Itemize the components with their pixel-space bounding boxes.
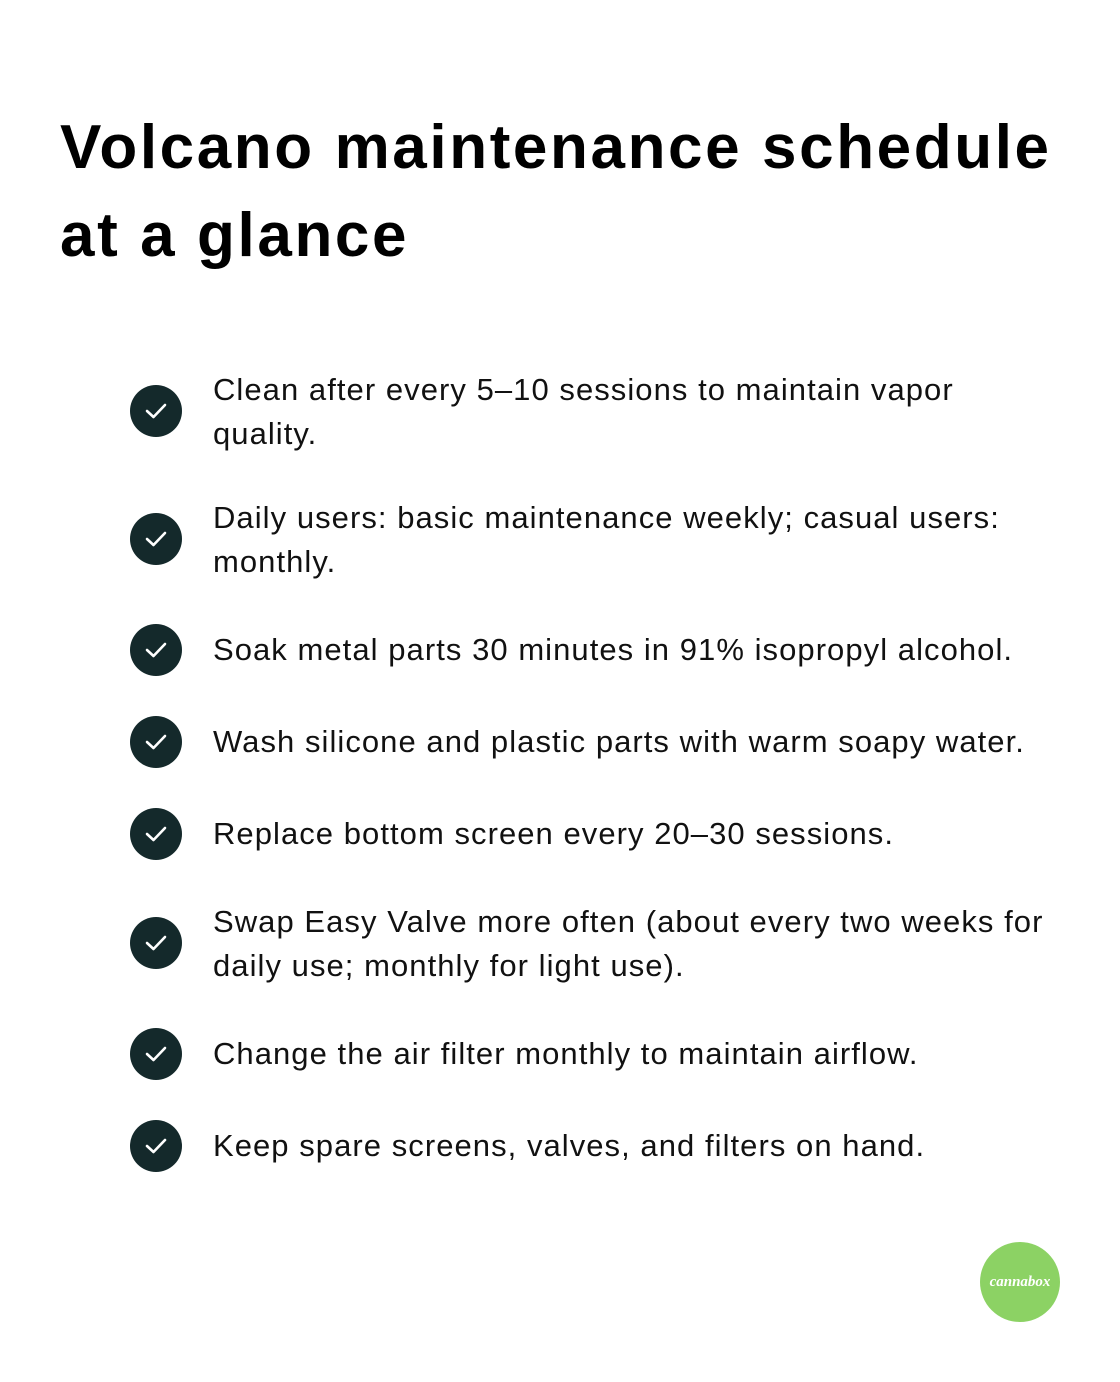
item 7 [130,1028,919,1080]
item 6 [130,904,1043,983]
item 3: Soak metal parts 30 minutes in 91% isopropyl alcohol. [213,632,1013,667]
item 2 [130,500,1000,579]
logo: cannabox: cannabox [990,1274,1050,1290]
item 7: Change the air filter monthly to maintain airflow. [213,1036,919,1071]
item 3 [130,624,1013,676]
item 1 [130,372,954,451]
item 5 [130,808,894,860]
item 1: Clean after every 5–10 sessions to maintain vapor [213,372,954,407]
item 2: monthly. [213,544,336,579]
title [60,113,1052,270]
logo: cannabox [980,1242,1060,1322]
item 1: quality. [213,416,317,451]
item 4: Wash silicone and plastic parts with warm soapy water. [213,724,1025,759]
title: at a glance [60,201,409,270]
item 4 [130,716,1025,768]
item 5: Replace bottom screen every 20–30 sessions. [213,816,894,851]
item 8: Keep spare screens, valves, and filters on hand. [213,1128,925,1163]
item 6: Swap Easy Valve more often (about every two weeks for [213,904,1043,939]
item 2: Daily users: basic maintenance weekly; casual users: [213,500,1000,535]
title: Volcano maintenance schedule [60,113,1052,182]
item 6: daily use; monthly for light use). [213,948,685,983]
item 8 [130,1120,925,1172]
